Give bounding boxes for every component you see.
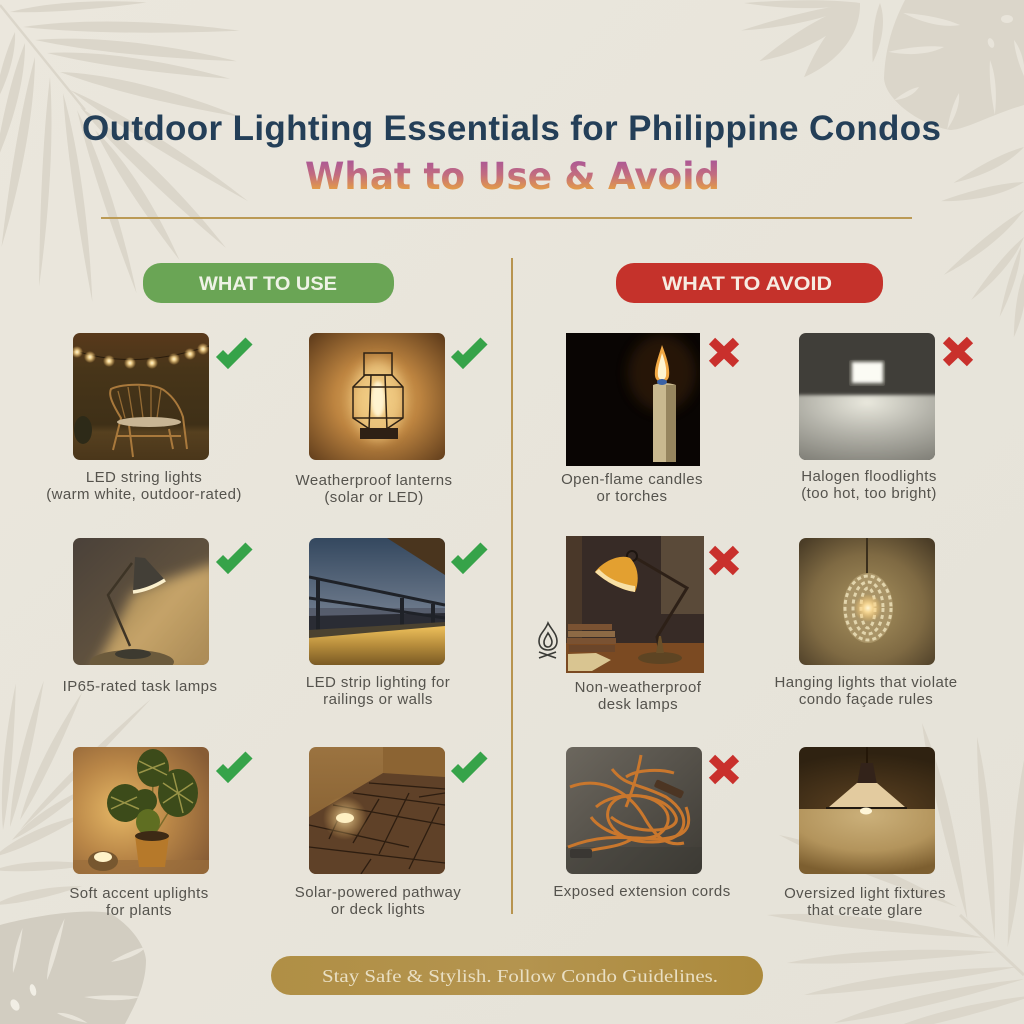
decorative palm frond: bottom right [767,721,1024,1024]
item: oversized fixtures [784,747,946,919]
image: glowing lantern [309,333,445,460]
label: Non-weatherproof [575,679,702,696]
decorative palm frond: top left [0,0,251,302]
label: condo façade rules [799,691,933,708]
item: solar pathway lights [295,747,484,918]
image: plant with uplight [73,747,209,874]
icon: flame over crossed logs [539,623,557,658]
label: or deck lights [331,901,425,918]
image: crystal pendant [799,538,935,665]
image: task lamp on table [73,538,209,665]
icon: check mark [220,546,249,567]
icon: cross mark [712,549,736,572]
label: LED strip lighting for [306,674,450,691]
item: open-flame candles [561,333,736,505]
icon: check mark [220,341,249,362]
item: IP65 task lamps [63,538,249,695]
item: hanging lights [774,538,958,708]
subtitle: What to Use & Avoid [305,155,720,198]
heading: what to use: WHAT TO USE [199,274,337,295]
label: (too hot, too bright) [801,485,937,502]
icon: check mark [220,755,249,776]
image: oversized pendant shade [799,747,935,874]
image: deck floor light [309,747,445,874]
decorative leaves: top right [740,0,1024,130]
label: Solar-powered pathway [295,884,461,901]
label: or torches [597,488,667,505]
label: railings or walls [323,691,433,708]
item: extension cords [553,747,736,900]
icon: check mark [454,341,484,362]
title: Outdoor Lighting Essentials for Philippine Condos [82,109,941,148]
image: tangled orange cords [566,747,702,874]
label: that create glare [807,902,923,919]
label: (solar or LED) [324,489,424,506]
item: LED strip lighting [306,538,484,708]
image: string lights and rattan chair [71,333,209,460]
item: LED string lights [46,333,249,503]
icon: cross mark [712,758,736,781]
footer banner: Stay Safe & Stylish. Follow Condo Guidelines. [322,966,718,986]
item: weatherproof lanterns [296,333,484,506]
heading divider [101,217,912,219]
label: IP65-rated task lamps [63,678,217,695]
item: non-weatherproof desk lamps [539,536,736,713]
label: Oversized light fixtures [784,885,946,902]
image: balcony railing with LED strip [309,538,445,665]
icon: check mark [454,546,484,567]
centre divider [511,258,513,914]
label: Soft accent uplights [69,885,209,902]
panel: what to avoid [539,263,970,919]
decorative palm frond: right edge [940,144,1024,338]
label: desk lamps [598,696,678,713]
decorative palm frond: bottom left [0,680,153,908]
heading: what to avoid [616,263,883,303]
panel: what to use [46,263,484,919]
image: amber desk lamp with books [566,536,704,673]
label: (warm white, outdoor-rated) [46,486,242,503]
decorative monstera leaf: bottom left [0,912,147,1024]
label: LED string lights [86,469,202,486]
label: Open-flame candles [561,471,703,488]
icon: check mark [454,755,484,776]
icon: cross mark [712,341,736,364]
label: for plants [106,902,172,919]
image: halogen floodlight [799,333,935,460]
label: Halogen floodlights [801,468,937,485]
image: lit candle [566,333,700,466]
item: halogen floodlights [789,333,970,502]
label: Weatherproof lanterns [296,472,452,489]
heading: what to use [143,263,394,303]
footer banner [271,956,763,995]
icon: cross mark [946,340,970,363]
item: accent uplights [69,747,249,919]
label: Hanging lights that violate [774,674,958,691]
label: Exposed extension cords [553,883,731,900]
heading: what to avoid: WHAT TO AVOID [662,274,832,295]
